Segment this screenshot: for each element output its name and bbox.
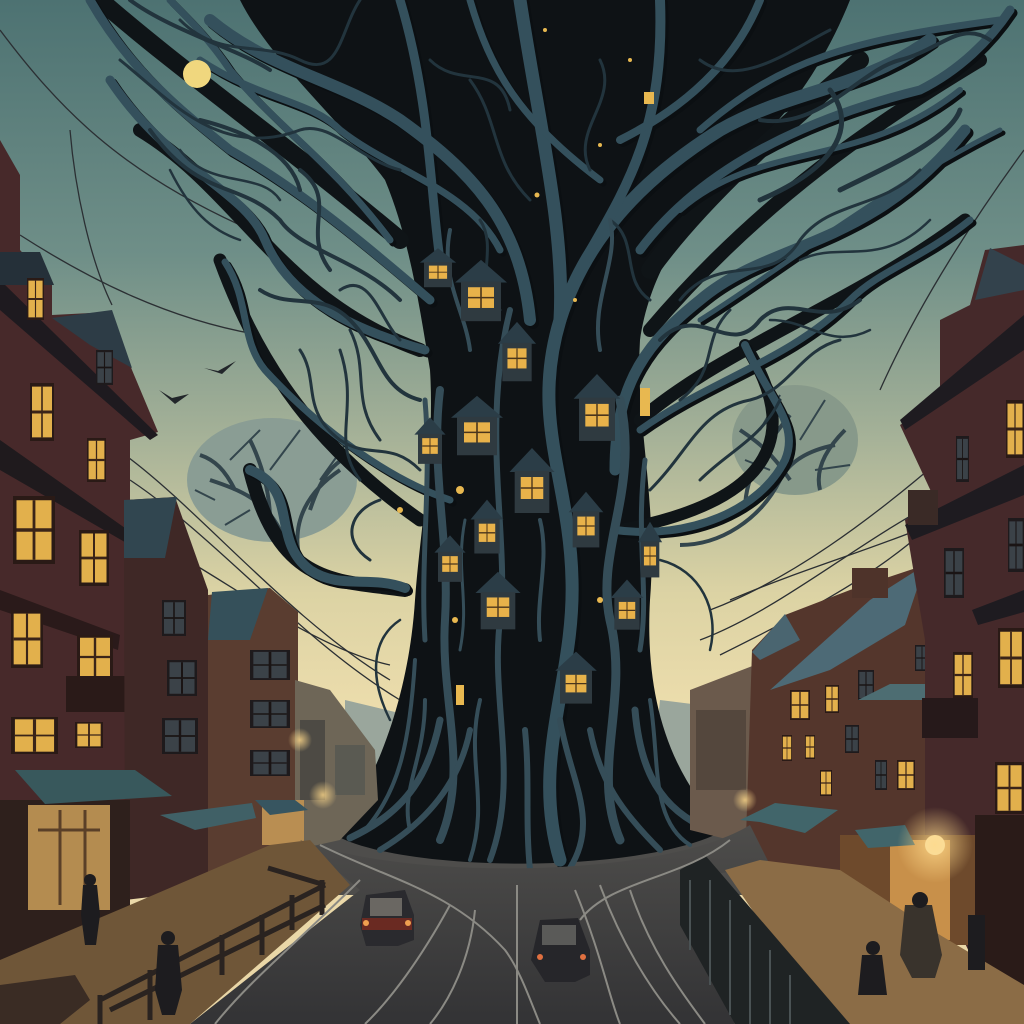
building: distant left [295,680,378,850]
building: far left [0,140,158,1000]
building: distant right [690,665,770,850]
distant hills [345,700,700,800]
moon [183,60,211,88]
building: far right [900,245,1024,985]
left sidewalk [0,840,350,1024]
tree: blue-gray branches [90,0,1010,860]
left shopfront [0,770,308,970]
right sidewalk [725,860,1024,1024]
ground behind tree [290,825,770,895]
tree lights [397,28,654,705]
right railing [680,855,850,1024]
left buildings [0,140,378,1000]
right buildings [690,245,1024,985]
tree: canopy side gaps filled with dark branches [100,0,980,590]
tree: branch shadows [93,3,1013,863]
tree: twigs [120,0,990,720]
left fence [100,868,325,1024]
car left [360,890,414,946]
car right [531,918,590,982]
power lines [0,30,1024,700]
tree: trunk strands [350,220,710,870]
building: third left [208,588,298,880]
background tree: right [680,385,858,545]
tram tracks [215,840,730,1024]
left steps [0,975,90,1024]
birds [159,361,236,404]
tree houses [414,248,662,704]
background tree: left [187,418,395,586]
street [190,825,770,1024]
tree: dark canopy mass [240,0,850,864]
street lamp glows [288,728,757,812]
right shopfront [740,803,975,945]
building: middle right [745,565,940,890]
pedestrians [81,874,985,1015]
building: second left [124,497,210,900]
